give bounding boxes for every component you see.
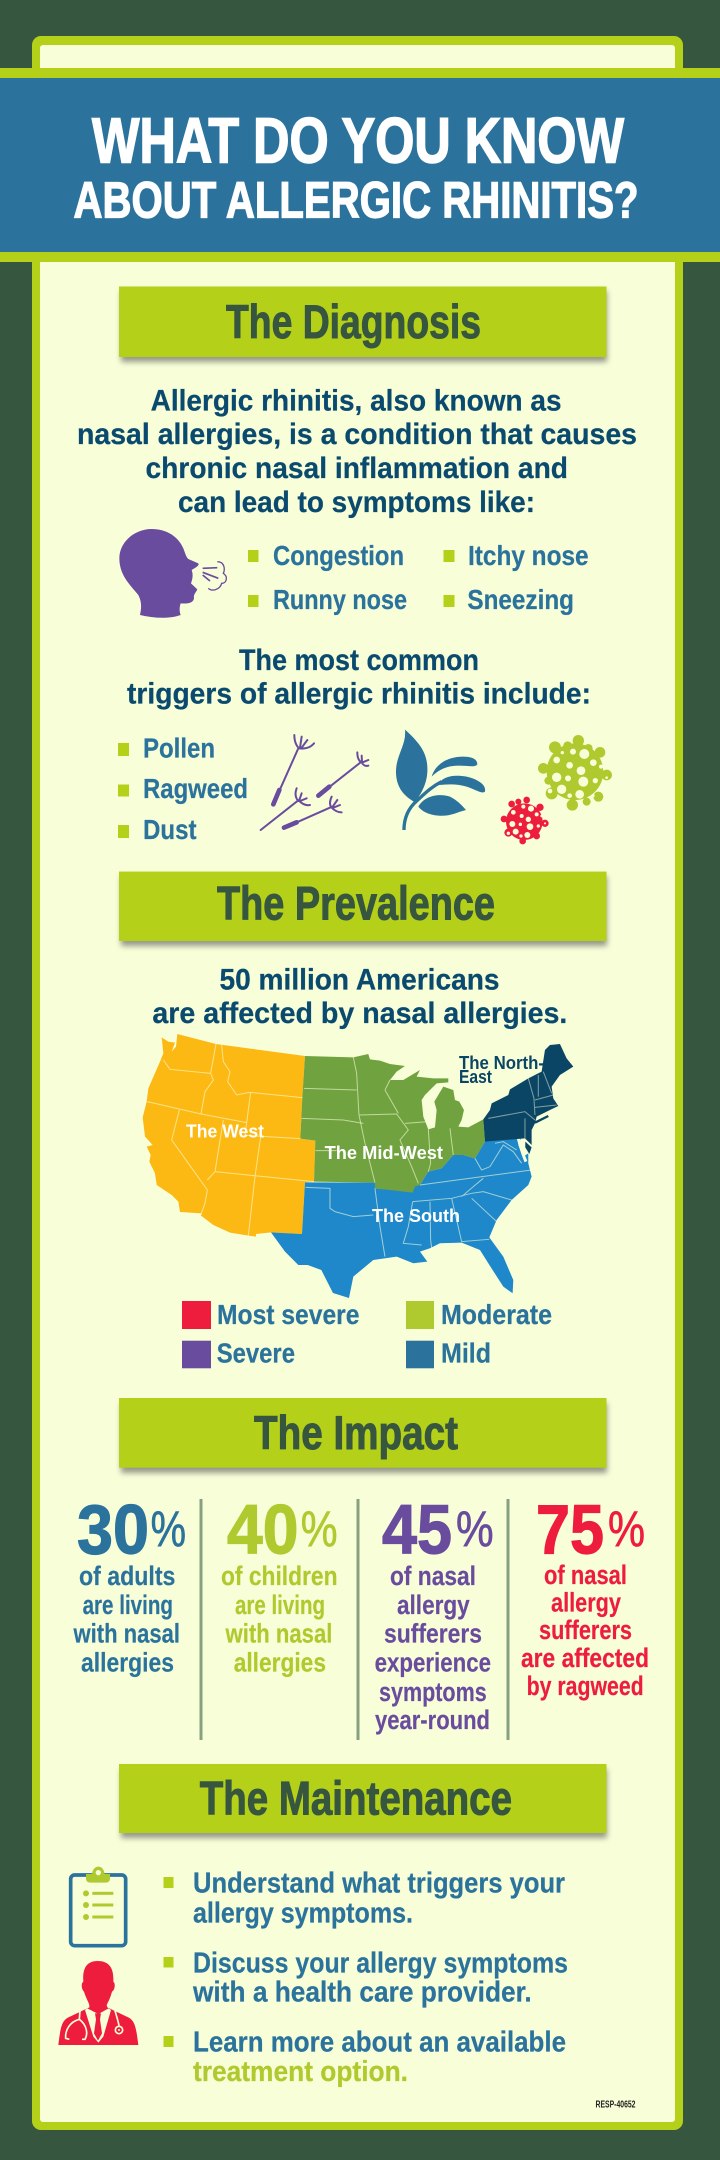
stat: 40% of children: allergies xyxy=(234,1648,326,1678)
stat: 45% of sufferers year-round: sufferers xyxy=(384,1619,482,1649)
icon: sneezing head xyxy=(119,529,226,618)
item: learn about treatment: Learn more about an available xyxy=(193,2027,566,2059)
stat: 40% of children: 40 xyxy=(227,1490,298,1568)
list: maintenance actions xyxy=(164,1868,568,2088)
title banner xyxy=(0,68,720,262)
heading: The Impact: The Impact xyxy=(254,1406,458,1459)
item: learn about treatment xyxy=(164,2027,566,2088)
text: common triggers intro: triggers of allergic rhinitis include: xyxy=(127,678,591,710)
list: symptoms: Congestion xyxy=(273,540,404,571)
list: triggers xyxy=(118,733,248,845)
stat: 40% of children: % xyxy=(301,1501,338,1557)
icon: pollen stalks xyxy=(261,735,368,830)
icon: green dust particle xyxy=(538,735,612,811)
text: definition of allergic rhinitis xyxy=(77,384,637,519)
list: triggers: Dust xyxy=(143,814,196,845)
heading: The Prevalence: The Prevalence xyxy=(217,876,495,930)
stat: 75% affected by ragweed: % xyxy=(608,1501,645,1557)
legend: Moderate xyxy=(441,1299,552,1330)
stat: 40% of children xyxy=(221,1490,338,1678)
Chesapeake Bay xyxy=(518,1138,526,1162)
legend: Severe xyxy=(217,1337,295,1368)
stat: 30% of adults: 30 xyxy=(77,1490,149,1568)
stat: 75% affected by ragweed: are affected xyxy=(521,1643,649,1673)
icon: doctor xyxy=(58,1961,138,2045)
item: understand triggers: Understand what triggers your xyxy=(193,1868,565,1900)
stat: 75% affected by ragweed xyxy=(521,1490,649,1701)
stat: 45% of sufferers year-round: allergy xyxy=(397,1590,470,1620)
stat: 45% of sufferers year-round: % xyxy=(456,1501,494,1557)
text: definition of allergic rhinitis: can lead to symptoms like: xyxy=(178,486,535,519)
heading: The Prevalence xyxy=(119,872,607,946)
legend: Most severe xyxy=(217,1299,360,1330)
map label: The South: The South xyxy=(372,1206,460,1226)
heading: The Maintenance: The Maintenance xyxy=(200,1772,512,1824)
stat: 45% of sufferers year-round: of nasal xyxy=(390,1561,476,1591)
stat: 75% affected by ragweed: sufferers xyxy=(539,1615,632,1645)
item: discuss with provider xyxy=(164,1947,568,2009)
stat: 75% affected by ragweed: allergy xyxy=(551,1588,621,1618)
list: symptoms: Sneezing xyxy=(467,584,574,615)
item: understand triggers xyxy=(164,1868,565,1930)
list: triggers: Ragweed xyxy=(143,773,248,804)
item: understand triggers: allergy symptoms. xyxy=(193,1898,413,1930)
stat: 30% of adults: of adults xyxy=(79,1561,175,1591)
stat: 30% of adults: allergies xyxy=(81,1648,174,1678)
stat: 45% of sufferers year-round: year-round xyxy=(375,1705,490,1735)
legend: Mild xyxy=(441,1337,491,1368)
text: 50 million Americans: 50 million Americans xyxy=(220,963,500,996)
stat: 75% affected by ragweed: by ragweed xyxy=(527,1671,644,1701)
region: West xyxy=(143,1034,315,1237)
stat: 30% of adults: are living xyxy=(83,1590,173,1620)
text: common triggers intro: The most common xyxy=(239,644,479,677)
text: definition of allergic rhinitis: nasal allergies, is a condition that causes xyxy=(77,418,637,451)
text: 50 million Americans: are affected by nasal allergies. xyxy=(152,997,567,1030)
text: 50 million Americans xyxy=(152,963,567,1030)
stat: 45% of sufferers year-round: 45 xyxy=(382,1490,452,1568)
region: South xyxy=(271,1137,532,1298)
stat: 45% of sufferers year-round: experience xyxy=(375,1648,491,1678)
icon: clipboard xyxy=(71,1867,126,1946)
icon: ragweed leaf xyxy=(396,730,485,830)
reference code: RESP-40652 xyxy=(596,2100,636,2111)
map label: The Mid-West: The Mid-West xyxy=(325,1143,443,1163)
text: common triggers intro xyxy=(127,644,591,710)
region: Mid-West xyxy=(300,1054,485,1193)
stat: 45% of sufferers year-round xyxy=(375,1490,494,1735)
map label: The North-East: East xyxy=(459,1067,492,1087)
legend xyxy=(182,1299,552,1368)
stat: 30% of adults: % xyxy=(151,1501,186,1557)
list: symptoms: Runny nose xyxy=(273,584,407,615)
stat: 40% of children: with nasal xyxy=(225,1619,332,1649)
list: triggers: Pollen xyxy=(143,733,215,764)
text: definition of allergic rhinitis: Allergic rhinitis, also known as xyxy=(151,384,562,418)
stat: 40% of children: are living xyxy=(235,1590,325,1620)
state borders xyxy=(147,1044,557,1257)
stat: 40% of children: of children xyxy=(221,1561,338,1591)
stat: 30% of adults xyxy=(73,1490,186,1678)
icon: red dust particle xyxy=(501,797,549,844)
item: discuss with provider: Discuss your allergy symptoms xyxy=(193,1947,568,1979)
heading: The Maintenance xyxy=(119,1764,607,1838)
heading: The Diagnosis: The Diagnosis xyxy=(226,295,481,348)
stat: 30% of adults: with nasal xyxy=(73,1619,180,1649)
heading: The Impact xyxy=(119,1398,607,1473)
map: United States regions xyxy=(143,1034,573,1298)
item: discuss with provider: with a health care provider. xyxy=(192,1977,532,2009)
heading: The Diagnosis xyxy=(119,286,607,362)
region: North-East xyxy=(483,1044,573,1145)
map label: The North-East xyxy=(459,1053,544,1087)
map label: The West: The West xyxy=(186,1122,264,1142)
list: symptoms: Itchy nose xyxy=(468,540,589,571)
stat: 75% affected by ragweed: of nasal xyxy=(544,1560,627,1590)
map label: The North-East: The North- xyxy=(459,1053,544,1073)
item: learn about treatment: treatment option. xyxy=(193,2056,408,2088)
stat: 45% of sufferers year-round: symptoms xyxy=(379,1677,487,1707)
text: definition of allergic rhinitis: chronic nasal inflammation and xyxy=(146,452,568,485)
stat: 75% affected by ragweed: 75 xyxy=(536,1490,604,1568)
list: symptoms xyxy=(248,540,589,615)
